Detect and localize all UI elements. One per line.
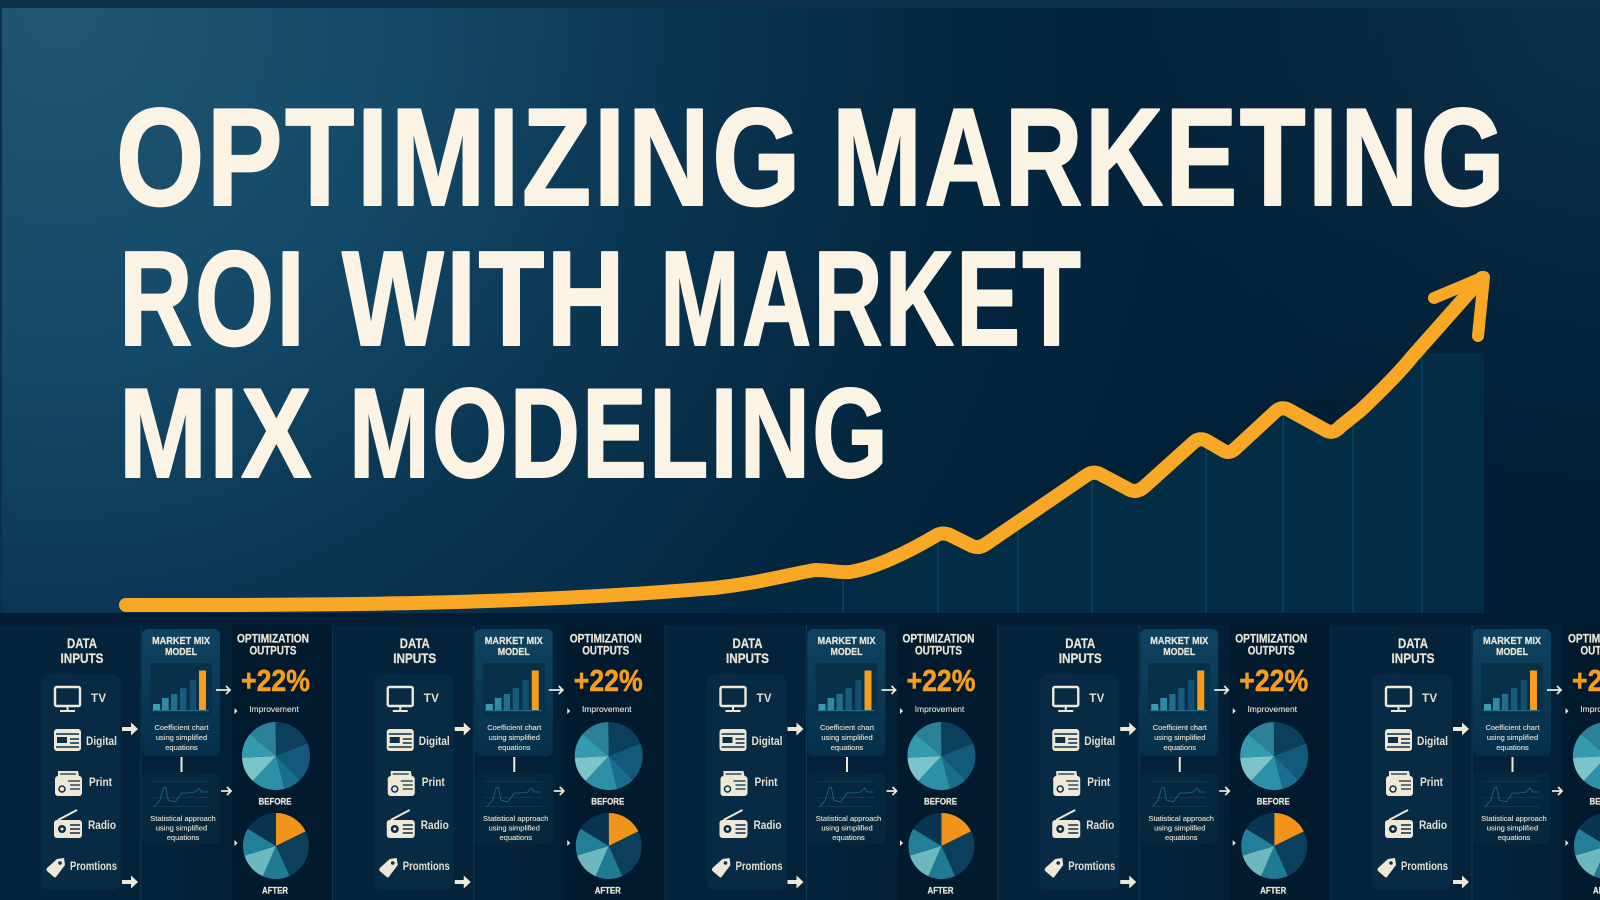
panel: statistical approach [475,773,553,844]
panel: market mix model: Coefficient chart [154,723,209,732]
panel: inputs list: Digital [752,736,782,748]
panel: pipeline strip 1 [0,625,333,900]
growth chart area [600,353,1484,613]
panel: market mix model: Coefficient chart [487,723,541,732]
panel: statistical approach: Statistical approach [816,814,881,823]
panel: market mix model: equations [1496,743,1529,752]
stat: +22% [241,663,310,698]
panel: statistical approach: Statistical approach [483,814,548,823]
panel: inputs list [1372,674,1452,890]
markers [900,708,903,846]
connector [1179,757,1181,772]
panel: market mix model: Coefficient chart [820,723,874,732]
panel: market mix model [1473,629,1551,756]
heading: optimization outputs: OPTIMIZATION [237,634,309,646]
panel: statistical approach: using simplified [489,824,540,832]
heading: optimization outputs [902,634,974,658]
title: OPTIMIZING [116,80,803,235]
panel: market mix model: using simplified [1487,733,1538,742]
panel: statistical approach: equations [1165,833,1198,842]
panel: inputs list: TV [1422,693,1437,705]
caption: Improvement [1247,704,1298,714]
heading: optimization outputs [1568,634,1600,658]
heading: optimization outputs [1235,634,1307,658]
connector [846,757,848,772]
arrow [882,686,896,795]
panel: market mix model: Coefficient chart [1153,723,1207,732]
arrow [1120,876,1136,888]
panel: statistical approach: Statistical approach [150,814,216,823]
panel: market mix model: MARKET MIX [485,635,543,647]
panel: inputs list: Print [89,777,112,789]
caption: Improvement [915,704,965,714]
arrow [1453,722,1469,736]
heading: data inputs: DATA [732,635,762,651]
panel: market mix model: MODEL [830,646,863,658]
heading: data inputs: INPUTS [1059,650,1102,666]
arrow [455,876,471,888]
heading: data inputs [60,635,104,666]
heading: optimization outputs: OUTPUTS [1248,646,1295,658]
pie: before [1240,722,1308,790]
markers [567,708,570,846]
arrow [1547,686,1562,795]
panel: market mix model [1140,629,1218,756]
panel: statistical approach: equations [167,833,200,842]
pie: after [243,813,309,879]
pie: after [1574,813,1600,879]
panel: market mix model [475,629,553,756]
panel: inputs list [706,674,786,890]
heading: data inputs: INPUTS [60,650,104,666]
panel: inputs list: Radio [421,820,449,832]
panel: inputs list: Promtions [403,861,450,873]
heading: data inputs: INPUTS [726,650,769,666]
panel: inputs list: Radio [754,820,782,832]
heading: optimization outputs: OUTPUTS [915,646,962,658]
panel: statistical approach [142,773,220,844]
panel: inputs list: Radio [88,820,116,832]
panel: statistical approach [1473,773,1551,844]
panel: inputs list: TV [756,693,772,705]
markers [1566,708,1568,846]
panel: pipeline strip 2 [333,625,666,900]
heading: optimization outputs [237,634,309,658]
arrow [1453,876,1469,888]
panel: inputs list: Digital [86,736,117,748]
title: ROI [119,223,307,374]
panel: market mix model: MARKET MIX [818,635,876,647]
label: AFTER [595,886,621,896]
panel: pipeline strip 4 [998,625,1331,900]
arrow [1120,722,1136,736]
panel: inputs list: TV [91,693,106,705]
heading: data inputs: DATA [1065,635,1095,651]
panel: statistical approach: equations [499,833,532,842]
hero panel [2,8,1600,613]
panel: market mix model: using simplified [821,733,873,742]
panel: statistical approach: using simplified [1154,824,1205,832]
panel: market mix model: using simplified [156,733,207,742]
panel: market mix model: MARKET MIX [1150,635,1208,647]
panel: market mix model: equations [1163,743,1196,752]
arrow [788,722,804,736]
panel: pipeline strip 5 [1331,625,1600,900]
pie: before [1573,722,1600,790]
panel: inputs list: Promtions [1401,861,1448,873]
panel: inputs list: TV [1089,693,1105,705]
heading: optimization outputs: OUTPUTS [582,646,630,658]
title: MODELING [349,362,890,504]
label: BEFORE [591,796,624,806]
heading: optimization outputs: OPTIMIZATION [1235,634,1307,646]
panel: inputs list: Digital [1084,736,1115,748]
arrow [1214,686,1229,795]
panel: market mix model: MODEL [1163,646,1196,658]
arrow [788,876,804,888]
heading: optimization outputs [570,634,642,658]
pie: after [908,813,974,879]
panel: market mix model: using simplified [1154,733,1205,742]
stat: +22% [574,663,643,698]
arrow [122,722,138,736]
panel: inputs list [1039,674,1119,890]
panel: inputs list: Promtions [736,861,782,873]
heading: data inputs: INPUTS [1392,650,1434,666]
panel: statistical approach [1140,773,1218,844]
panel: market mix model: equations [165,743,198,752]
panel: inputs list: Digital [1417,736,1448,748]
label: BEFORE [258,796,292,806]
panel: inputs list: Radio [1419,820,1447,832]
heading: data inputs: DATA [1398,635,1428,651]
stat: +22% [906,663,976,698]
panel: inputs list [41,674,121,890]
heading: optimization outputs: OPTIMIZATION [570,634,642,646]
connector [180,757,182,772]
label: AFTER [1260,886,1287,896]
connector [1512,757,1514,772]
heading: data inputs [1392,635,1434,666]
panel: statistical approach: using simplified [156,824,207,832]
title: MIX [119,362,314,504]
band below hero [0,613,1600,625]
arrow [122,876,138,888]
panel: inputs list: Radio [1086,820,1114,832]
heading: data inputs [393,635,436,666]
panel: inputs list: TV [424,693,439,705]
heading: data inputs: DATA [67,635,97,651]
panel: statistical approach: using simplified [821,824,873,832]
pie: after [1241,813,1307,879]
panel: inputs list: Print [1087,777,1110,789]
title [116,80,1507,504]
heading: data inputs [726,635,769,666]
label: AFTER [928,886,954,896]
panel: market mix model: MARKET MIX [152,635,210,647]
panel: market mix model: equations [831,743,864,752]
pie: before [575,722,643,790]
panel: statistical approach: equations [1498,833,1531,842]
heading: data inputs [1059,635,1102,666]
panel: market mix model [142,629,220,756]
connector [513,757,515,772]
label: BEFORE [924,796,957,806]
panel: inputs list: Print [422,777,445,789]
panel: market mix model: using simplified [489,733,540,742]
panel: inputs list: Promtions [1068,861,1115,873]
pie: before [907,722,976,790]
markers [234,708,238,846]
pie: after [576,813,642,879]
panel: market mix model [808,629,886,756]
panel: statistical approach: Statistical approach [1149,814,1214,823]
panel: statistical approach: equations [832,833,865,842]
panel: inputs list: Print [1420,777,1443,789]
label: AFTER [262,886,288,896]
label: BEFORE [1257,796,1290,806]
growth arrow [126,277,1484,605]
heading: data inputs: DATA [400,635,430,651]
heading: optimization outputs: OPTIMIZATION [902,634,974,646]
caption: Improvement [249,704,299,714]
panel: market mix model: equations [498,743,531,752]
caption: Improvement [582,704,632,714]
panel: market mix model: MODEL [498,646,530,658]
panel: statistical approach: Statistical approach [1481,814,1547,823]
pie: before [242,722,310,790]
arrow [455,722,471,736]
title: WITH [342,223,627,374]
panel: statistical approach: using simplified [1487,824,1538,832]
panel: inputs list: Print [754,777,778,789]
panel: market mix model: MODEL [1496,646,1528,658]
arrow [549,686,564,795]
stat: +22% [1239,663,1308,698]
panel: market mix model: MARKET MIX [1483,635,1541,647]
panel: inputs list: Digital [419,736,450,748]
title: MARKET [660,223,1083,374]
arrow [216,686,231,795]
panel: inputs list: Promtions [70,861,117,873]
panel: inputs list [374,674,454,890]
markers [1233,708,1236,846]
panel: statistical approach [808,773,886,844]
panel: market mix model: Coefficient chart [1485,723,1540,732]
panel: pipeline strip 3 [666,625,998,900]
heading: optimization outputs: OUTPUTS [250,646,297,658]
panel: market mix model: MODEL [165,646,197,658]
heading: data inputs: INPUTS [393,650,436,666]
